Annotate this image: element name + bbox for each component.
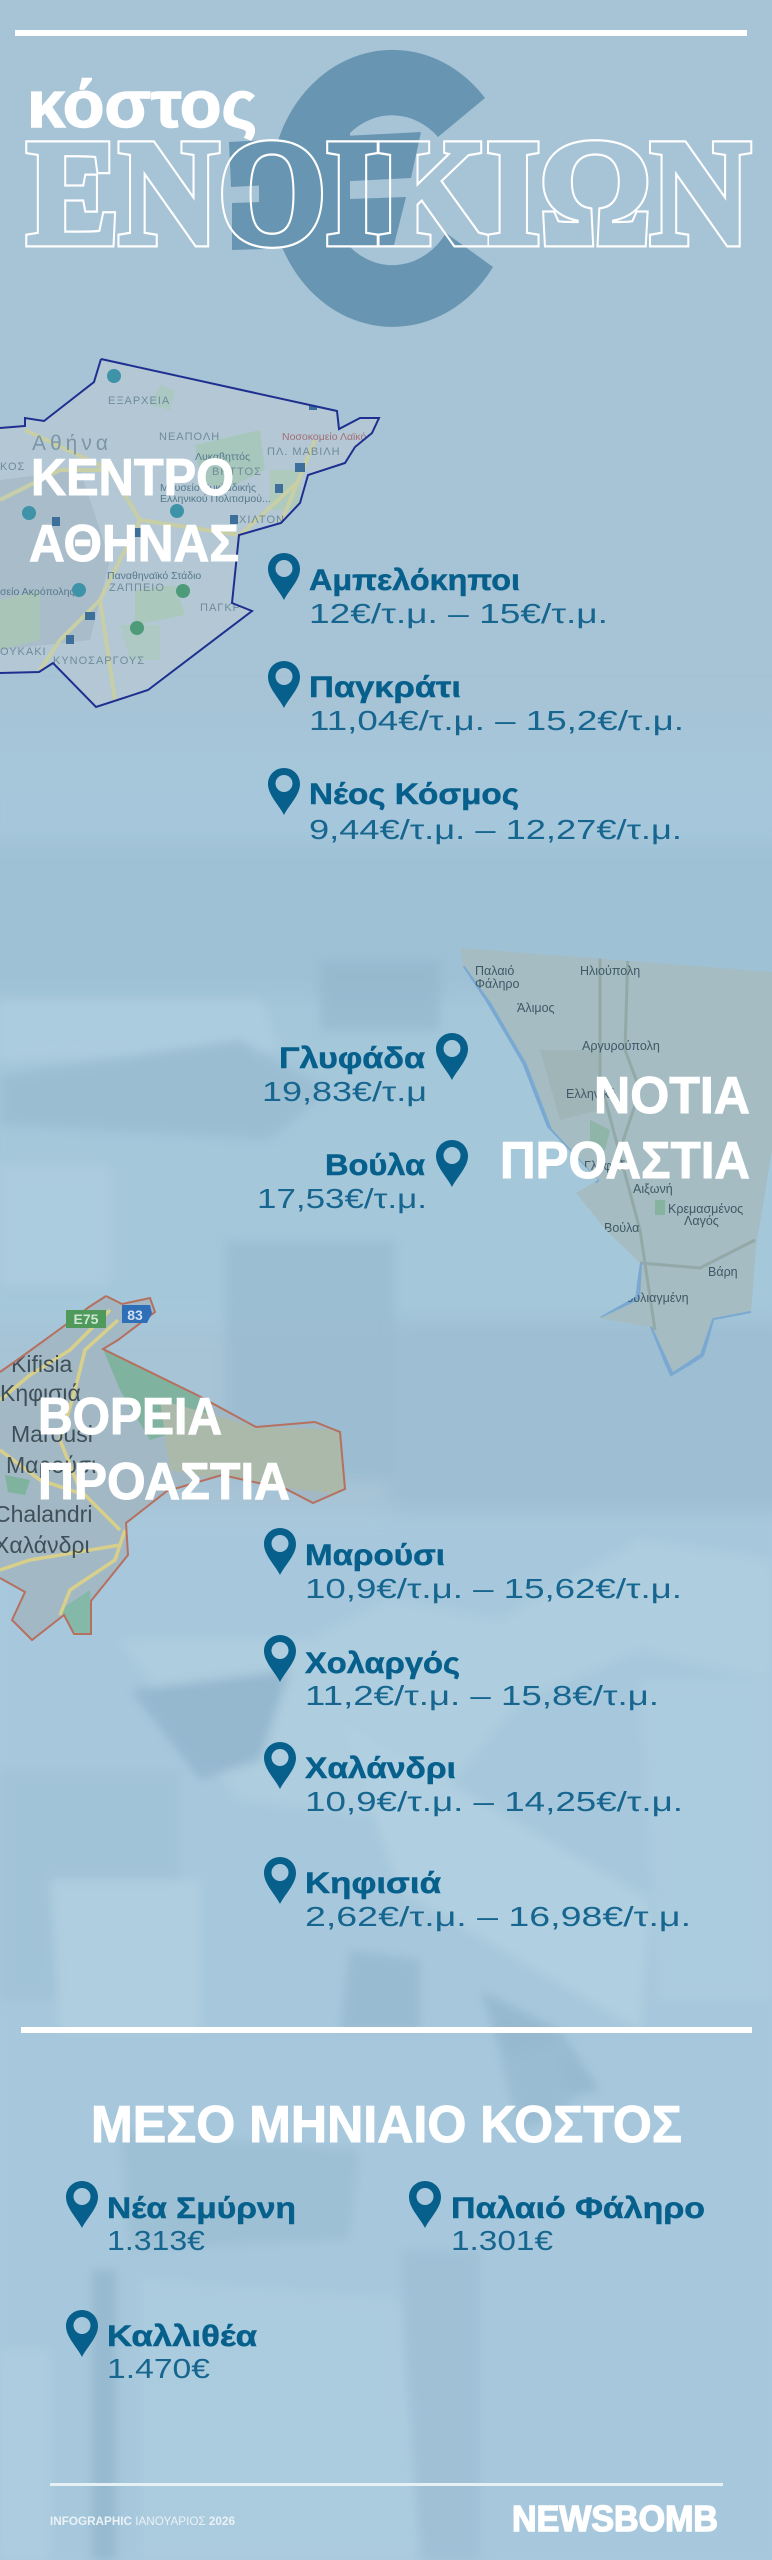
map: central Athens: σείο Ακρόπολης: [0, 586, 74, 598]
entry: Αμπελόκηποι: [268, 553, 608, 629]
map: central Athens: ΧΙΛΤΟΝ: [239, 514, 285, 526]
map: central Athens: Αθήνα: [32, 432, 112, 455]
entry: Παγκράτι: 11,04€/τ.μ. – 15,2€/τ.μ.: [309, 705, 684, 736]
map: southern suburbs: Ελληνικό: [566, 1087, 616, 1101]
top rule: [15, 30, 747, 36]
entry: Χολαργός: [264, 1635, 659, 1711]
map: southern suburbs: [455, 940, 772, 1385]
entry: Βούλα: 17,53€/τ.μ.: [257, 1183, 427, 1214]
entry: Χαλάνδρι: 10,9€/τ.μ. – 14,25€/τ.μ.: [305, 1786, 683, 1817]
entry: Χολαργός: 11,2€/τ.μ. – 15,8€/τ.μ.: [305, 1680, 659, 1711]
map: central Athens: Ελληνικού Πολιτισμού...: [160, 493, 271, 505]
map: central Athens: ΕΞΑΡΧΕΙΑ: [108, 395, 170, 407]
heading: ΚΕΝΤΡΟ ΑΘΗΝΑΣ: [29, 449, 239, 573]
map: central Athens: [0, 355, 385, 710]
map: southern suburbs: Κρεμασμένος: [668, 1202, 743, 1216]
map: northern suburbs: Marousi: [11, 1421, 93, 1447]
entry: Κηφισιά: [264, 1857, 691, 1932]
entry: Χαλάνδρι: Χαλάνδρι: [305, 1752, 456, 1785]
entry: Νέος Κόσμος: 9,44€/τ.μ. – 12,27€/τ.μ.: [309, 814, 682, 845]
map: northern suburbs: Kifisia: [11, 1351, 73, 1377]
map: southern suburbs: Αργυρούπολη: [582, 1039, 660, 1053]
entry: Καλλιθέα: 1.470€: [107, 2353, 211, 2384]
map: central Athens: ΚΟΣ: [0, 461, 25, 473]
map: central Athens: ΚΥΝΟΣΑΡΓΟΥΣ: [53, 655, 145, 667]
map: southern suburbs: Άλιμος: [517, 1001, 555, 1015]
map: central Athens: Νοσοκομείο Λαϊκό: [282, 431, 366, 443]
map: central Athens: ΒΗΤΤΟΣ: [212, 466, 262, 478]
map: northern suburbs: Κηφισιά: [0, 1380, 81, 1406]
entry: Μαρούσι: [264, 1528, 682, 1604]
map: southern suburbs: Φάληρο: [475, 977, 520, 991]
map: southern suburbs: Λαγός: [684, 1214, 719, 1228]
entry: Γλυφάδα: 19,83€/τ.μ: [262, 1076, 427, 1107]
map: southern suburbs: Βουλιαγμένη: [618, 1291, 689, 1305]
entry: Παγκράτι: Παγκράτι: [309, 671, 461, 704]
heading: ΚΕΝΤΡΟ ΑΘΗΝΑΣ: ΚΕΝΤΡΟ: [31, 449, 234, 507]
map: central Athens: Μουσείο Κυκλαδικής: [160, 482, 256, 494]
map: southern suburbs: Αιξωνή: [633, 1182, 673, 1196]
heading: ΒΟΡΕΙΑ ΠΡΟΑΣΤΙΑ: ΒΟΡΕΙΑ: [38, 1388, 222, 1446]
entry: Παγκράτι: [268, 661, 684, 736]
entry: Νέος Κόσμος: [268, 768, 682, 845]
logo: NEWSBOMB: NEWSBOMB: [512, 2498, 718, 2539]
map: southern suburbs: Βούλα: [604, 1221, 639, 1235]
map: central Athens: Παναθηναϊκό Στάδιο: [107, 570, 201, 582]
map: northern suburbs: Μαρούσι: [6, 1452, 96, 1478]
entry: Καλλιθέα: Καλλιθέα: [107, 2320, 258, 2353]
heading: ΒΟΡΕΙΑ ΠΡΟΑΣΤΙΑ: ΠΡΟΑΣΤΙΑ: [38, 1453, 290, 1511]
entry: Χολαργός: Χολαργός: [305, 1647, 460, 1680]
map: southern suburbs: Παλαιό: [475, 964, 514, 978]
section rule: [21, 2027, 752, 2033]
road shield: 83: 83: [127, 1307, 143, 1323]
entry: Μαρούσι: 10,9€/τ.μ. – 15,62€/τ.μ.: [305, 1573, 682, 1604]
heading: ΝΟΤΙΑ ΠΡΟΑΣΤΙΑ: ΝΟΤΙΑ: [594, 1067, 750, 1125]
map: northern suburbs: [0, 1290, 350, 1650]
entry: Κηφισιά: Κηφισιά: [305, 1867, 442, 1900]
heading: ΝΟΤΙΑ ΠΡΟΑΣΤΙΑ: ΠΡΟΑΣΤΙΑ: [500, 1132, 750, 1190]
entry: Κηφισιά: 2,62€/τ.μ. – 16,98€/τ.μ.: [305, 1901, 691, 1932]
heading: ΝΟΤΙΑ ΠΡΟΑΣΤΙΑ: [500, 1067, 750, 1190]
map: central Athens: ΖΑΠΠΕΙΟ: [109, 582, 165, 594]
map: central Athens: ΠΑΓΚΡ: [200, 602, 241, 614]
entry: Νέα Σμύρνη: Νέα Σμύρνη: [107, 2192, 296, 2225]
map: southern suburbs: Ηλιούπολη: [580, 964, 640, 978]
entry: Βούλα: [257, 1140, 468, 1214]
map: central Athens: ΠΛ. ΜΑΒΙΛΗ: [267, 446, 341, 458]
map: southern suburbs: Γλυφάδα: [584, 1159, 633, 1173]
entry: Καλλιθέα: [66, 2310, 258, 2384]
entry: Παλαιό Φάληρο: Παλαιό Φάληρο: [451, 2192, 705, 2225]
entry: Νέος Κόσμος: Νέος Κόσμος: [309, 778, 519, 811]
entry: Αμπελόκηποι: Αμπελόκηποι: [309, 564, 520, 597]
entry: Αμπελόκηποι: 12€/τ.μ. – 15€/τ.μ.: [309, 598, 608, 629]
entry: Παλαιό Φάληρο: 1.301€: [451, 2225, 554, 2256]
entry: Βούλα: Βούλα: [325, 1149, 426, 1182]
footer credit: INFOGRAPHIC ΙΑΝΟΥΑΡΙΟΣ 2026: [50, 2514, 235, 2528]
entry: Παλαιό Φάληρο: [409, 2181, 705, 2256]
map: central Athens: ΝΕΑΠΟΛΗ: [159, 431, 220, 443]
map: southern suburbs: Βάρη: [708, 1265, 738, 1279]
entry: Νέα Σμύρνη: [66, 2181, 296, 2256]
footer rule: [50, 2483, 723, 2486]
euro symbol: [229, 50, 493, 327]
road shield: E75: [66, 1310, 106, 1328]
road shield: 83: [122, 1305, 152, 1323]
entry: Μαρούσι: Μαρούσι: [305, 1539, 445, 1572]
map: central Athens: Λυκαβηττός: [195, 451, 250, 463]
heading: ΒΟΡΕΙΑ ΠΡΟΑΣΤΙΑ: [38, 1388, 290, 1511]
road shield: E75: E75: [74, 1311, 99, 1327]
entry: Γλυφάδα: [262, 1033, 468, 1107]
map: central Athens: ΟΥΚΑΚΙ: [0, 646, 47, 658]
entry: Χαλάνδρι: [264, 1742, 683, 1817]
entry: Νέα Σμύρνη: 1.313€: [107, 2225, 205, 2256]
heading: ΜΕΣΟ ΜΗΝΙΑΙΟ ΚΟΣΤΟΣ: ΜΕΣΟ ΜΗΝΙΑΙΟ ΚΟΣΤΟΣ: [91, 2096, 682, 2154]
entry: Γλυφάδα: Γλυφάδα: [279, 1042, 426, 1075]
title: κόστος: κόστος: [27, 67, 257, 141]
heading: ΚΕΝΤΡΟ ΑΘΗΝΑΣ: ΑΘΗΝΑΣ: [29, 515, 239, 573]
